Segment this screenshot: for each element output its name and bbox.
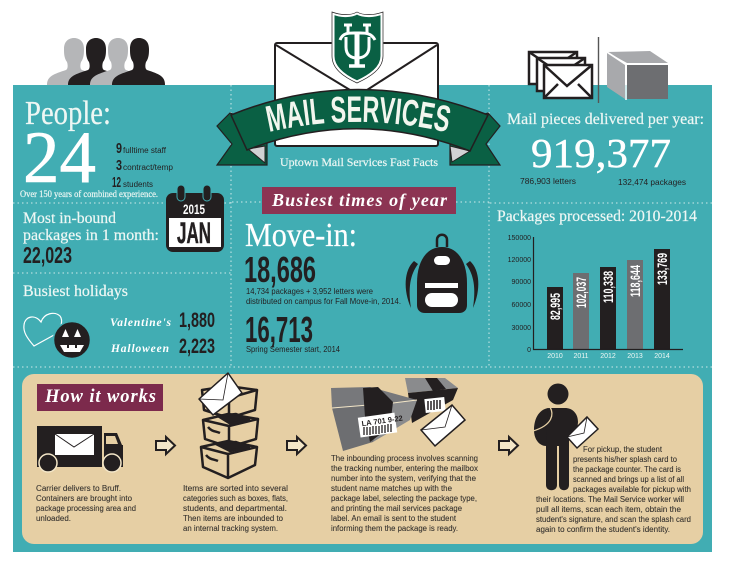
mail pieces stat: 919,377 bbox=[531, 130, 671, 176]
icon: people silhouettes bbox=[47, 38, 165, 85]
text: step 2: students, and departmental. bbox=[183, 503, 287, 513]
most in-bound packages bbox=[23, 210, 159, 268]
icon: heart bbox=[24, 313, 62, 346]
banner: how it works bbox=[37, 384, 163, 411]
divider bbox=[598, 37, 600, 103]
text: step 4: presents his/her splash card to bbox=[573, 454, 677, 464]
move-in stats: 16,713 bbox=[245, 309, 313, 350]
people block: 12 bbox=[112, 174, 121, 191]
ribbon banner bbox=[216, 88, 501, 166]
bar chart: 60000 bbox=[512, 302, 531, 309]
most in-bound packages: Most in-bound bbox=[23, 210, 116, 227]
people block: 9 bbox=[116, 140, 122, 157]
bar chart: 82,995 bbox=[548, 293, 563, 320]
busiest holidays bbox=[23, 283, 215, 358]
icon: envelope on boxes bbox=[199, 373, 242, 415]
heading: packages processed: Packages processed: 2010-2014 bbox=[497, 208, 697, 225]
icon: envelope held bbox=[567, 417, 598, 448]
bar chart: 0 bbox=[527, 347, 531, 354]
text: step 3: label. An email is sent to the student bbox=[331, 513, 457, 523]
text: step 3: The inbounding process involves scanning bbox=[331, 453, 478, 463]
people block: students bbox=[123, 180, 153, 189]
bar chart: 150000 bbox=[508, 235, 531, 242]
bar chart: 2011 bbox=[573, 353, 589, 360]
panel: teal background bbox=[13, 85, 712, 552]
text: step 1: Carrier delivers to Bruff. bbox=[36, 483, 121, 493]
icon: large envelope bbox=[275, 43, 438, 146]
icon: labelled packages: LA 701 9-22 bbox=[361, 414, 403, 428]
text: step 2: Items are sorted into several bbox=[183, 483, 288, 493]
icon: package box bbox=[607, 51, 668, 100]
mail pieces stat: 786,903 letters bbox=[520, 176, 576, 186]
mail pieces stat bbox=[507, 111, 704, 187]
people block: 3 bbox=[116, 157, 122, 174]
icon: labelled packages bbox=[331, 378, 465, 451]
icon: arrow 3 bbox=[499, 437, 518, 454]
text: step 3: informing them the package is ready. bbox=[331, 523, 458, 533]
busiest holidays: 1,880 bbox=[179, 309, 215, 332]
icon: sorted boxes bbox=[199, 373, 258, 478]
icon: calendar bbox=[166, 185, 224, 252]
subtitle: Uptown Mail Services Fast Facts bbox=[280, 157, 439, 169]
text: step 1 bbox=[36, 483, 136, 523]
most in-bound packages: packages in 1 month: bbox=[23, 227, 159, 244]
text: step 2: categories such as boxes, flats, bbox=[183, 493, 288, 503]
banner: busiest times of year: Busiest times of year bbox=[271, 190, 448, 210]
move-in stats: 14,734 packages + 3,952 letters were bbox=[246, 286, 373, 296]
move-in stats: distributed on campus for Fall Move-in, 2014. bbox=[246, 296, 401, 306]
text: step 4: the package counter. The card is bbox=[573, 464, 681, 474]
panel: how it works bbox=[22, 374, 703, 544]
bar chart: 2010 bbox=[547, 353, 563, 360]
people block: Over 150 years of combined experience. bbox=[20, 189, 158, 200]
text: step 2: an internal tracking system. bbox=[183, 523, 278, 533]
icon: arrow 2 bbox=[287, 437, 306, 454]
busiest holidays: Valentine's bbox=[110, 317, 172, 329]
bar chart: 102,037 bbox=[574, 277, 589, 308]
icon: envelope by packages bbox=[421, 405, 465, 446]
busiest holidays: 2,223 bbox=[179, 335, 215, 358]
bar chart: 2012 bbox=[600, 353, 616, 360]
text: step 2: Then items are inbounded to bbox=[183, 513, 283, 523]
mail pieces stat: 132,474 packages bbox=[618, 177, 686, 187]
text: step 1: Containers are brought into bbox=[36, 493, 132, 503]
bar chart: 2013 bbox=[627, 353, 643, 360]
icon: shield crest bbox=[332, 12, 383, 83]
bar chart: 2014 bbox=[654, 353, 670, 360]
move-in stats bbox=[244, 217, 401, 354]
people block: fulltime staff bbox=[123, 146, 167, 155]
icon: student figure bbox=[533, 384, 598, 490]
text: step 3: package label, selecting the package type, bbox=[331, 493, 477, 503]
icon: backpack bbox=[406, 235, 478, 313]
text: step 3: the tracking number, entering the mailbox bbox=[331, 463, 479, 473]
text: step 4: For pickup, the student bbox=[583, 444, 663, 454]
busiest holidays: Busiest holidays bbox=[23, 283, 128, 300]
banner: how it works: How it works bbox=[44, 387, 156, 407]
text: step 4: student's signature, and scan the splash card bbox=[536, 514, 691, 524]
bar chart: 30000 bbox=[512, 325, 531, 332]
text: step 1: unloaded. bbox=[36, 513, 71, 523]
text: step 3: number into the system, verifying that the bbox=[331, 473, 476, 483]
icon: delivery truck bbox=[37, 426, 123, 472]
text: step 4: packages available for pickup with bbox=[573, 484, 691, 494]
bar chart: 90000 bbox=[512, 279, 531, 286]
people block: contract/temp bbox=[123, 163, 174, 172]
bar chart bbox=[508, 235, 683, 360]
bar chart: 110,338 bbox=[601, 271, 616, 303]
text: step 4 bbox=[536, 444, 691, 534]
move-in stats: Spring Semester start, 2014 bbox=[246, 344, 340, 354]
icon: envelopes stack bbox=[529, 52, 592, 98]
icon: arrow 1 bbox=[156, 437, 175, 454]
mail pieces stat: Mail pieces delivered per year: bbox=[507, 111, 704, 128]
move-in stats: 18,686 bbox=[244, 249, 316, 290]
move-in stats: Move-in: bbox=[245, 217, 357, 254]
icon: calendar: JAN bbox=[177, 217, 211, 250]
text: step 3: student name matches up with the bbox=[331, 483, 452, 493]
bar chart: 133,769 bbox=[655, 253, 670, 285]
text: step 4: scanned and brings up a list of all bbox=[573, 474, 684, 484]
icon: pumpkin face bbox=[54, 322, 90, 358]
bar chart: 120000 bbox=[508, 257, 531, 264]
banner: busiest times of year bbox=[262, 187, 456, 214]
heading: Mail Services: MAIL SERVICES bbox=[266, 96, 450, 132]
text: step 3 bbox=[331, 453, 479, 533]
text: step 4: their locations. The Mail Service worker will bbox=[536, 494, 684, 504]
text: step 3: and printing the mail services package bbox=[331, 503, 462, 513]
text: step 4: pull all items, scan each item, obtain the bbox=[536, 504, 681, 514]
most in-bound packages: 22,023 bbox=[23, 242, 72, 268]
bar chart: 118,644 bbox=[628, 265, 643, 297]
busiest holidays: Halloween bbox=[110, 343, 169, 355]
text: step 1: package processing area and bbox=[36, 503, 136, 513]
people block: People: bbox=[25, 95, 111, 132]
text: step 2 bbox=[183, 483, 288, 533]
people block bbox=[20, 95, 174, 200]
text: step 4: again to confirm the student's identity. bbox=[536, 524, 670, 534]
people block: 24 bbox=[23, 117, 96, 199]
icon: calendar: 2015 bbox=[183, 201, 205, 217]
